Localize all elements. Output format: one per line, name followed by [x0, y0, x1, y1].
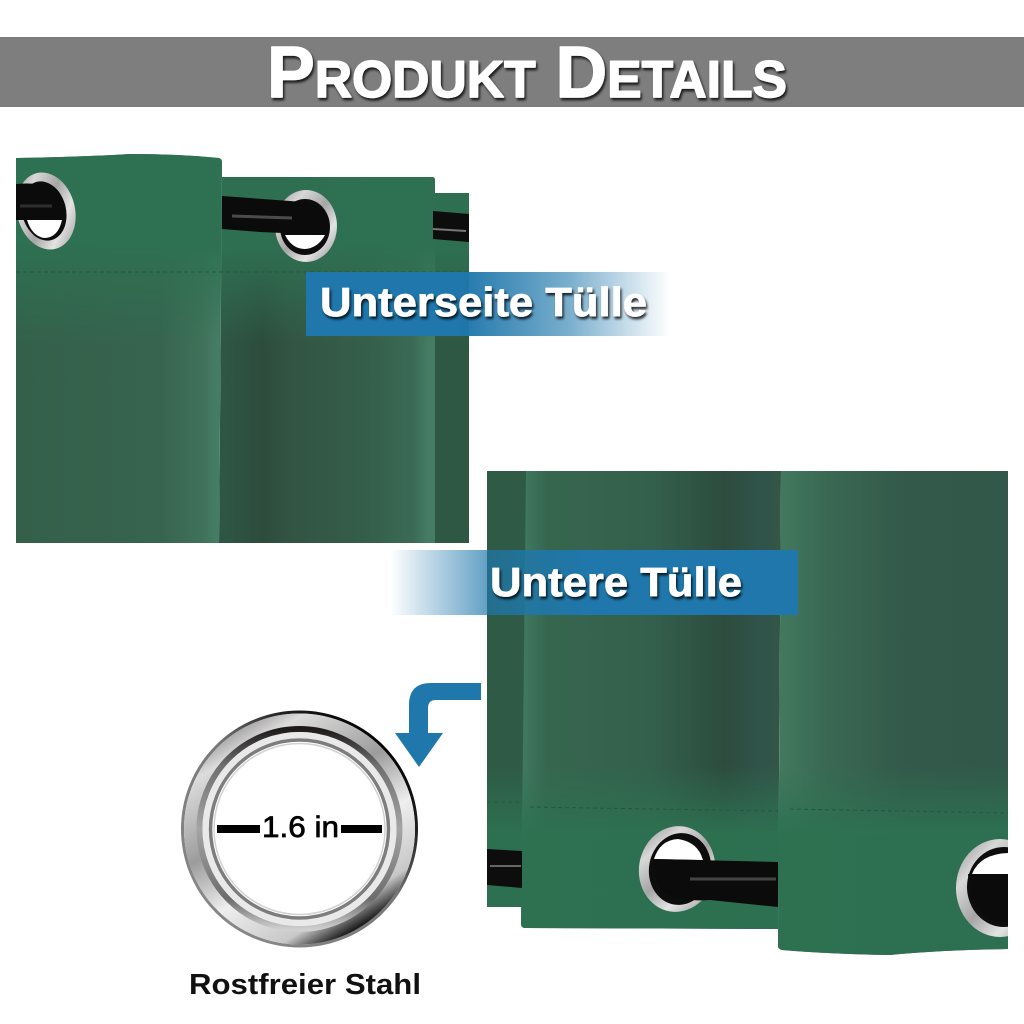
- title: PRODUKT DETAILS: [267, 33, 787, 113]
- label text: Unterseite Tülle: [320, 279, 647, 325]
- caption: Rostfreier Stahl: [189, 969, 421, 1001]
- photo: upper curtain with top grommets: [8, 154, 469, 543]
- right rod segment: [433, 211, 469, 242]
- arrow: [395, 683, 481, 767]
- grommet top middle: [222, 190, 337, 262]
- dimension line: 1.6 in: [262, 811, 339, 844]
- photo: lower curtain with bottom grommets: [487, 471, 1024, 955]
- grommet top left: [16, 172, 76, 250]
- seam stitching lower: [487, 802, 1008, 813]
- title banner: [0, 33, 1024, 113]
- label band: Untere Tülle: [390, 550, 798, 615]
- lower curtain panels: [487, 471, 1008, 955]
- curtain panels: [16, 154, 469, 543]
- left rod segment: [487, 849, 522, 888]
- label text: Untere Tülle: [490, 559, 742, 605]
- grommet bottom middle: [638, 826, 778, 912]
- grommet bottom right: [956, 839, 1008, 937]
- seam stitching: [16, 272, 468, 273]
- icon: steel ring: [182, 712, 416, 946]
- label band: Unterseite Tülle: [306, 272, 670, 336]
- dimension line: [217, 811, 382, 844]
